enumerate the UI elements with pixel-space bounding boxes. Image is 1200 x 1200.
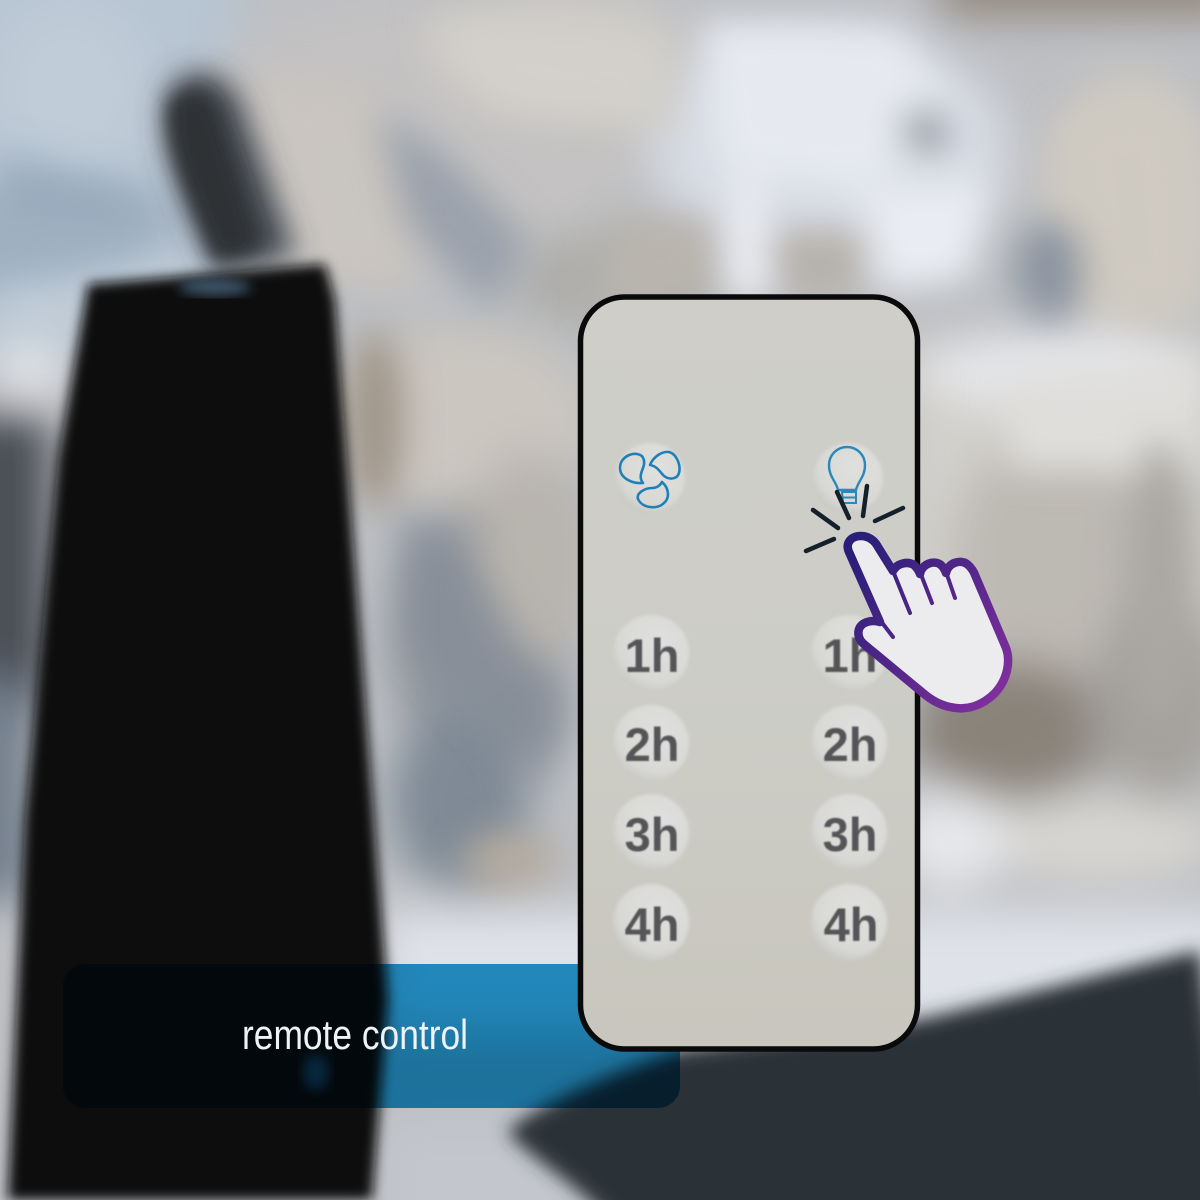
- timer buttons right: 1h: [823, 629, 877, 682]
- timer buttons left: [613, 615, 689, 960]
- icon: tap burst lines: [806, 486, 903, 551]
- remote control body: [580, 297, 918, 1049]
- icon: fan button: [615, 443, 685, 513]
- timer buttons right: 2h: [823, 718, 877, 771]
- label panel: [63, 964, 680, 1108]
- timer buttons left: 4h: [625, 898, 679, 951]
- timer buttons left: 3h: [625, 808, 679, 861]
- tower humidifier: [8, 72, 388, 1200]
- timer buttons right: 4h: [824, 898, 878, 951]
- label text: remote control: [242, 1011, 468, 1058]
- dark cushion: [508, 950, 1200, 1200]
- icon: pointing hand: [848, 536, 1008, 708]
- timer buttons left: 1h: [625, 629, 679, 682]
- icon: light bulb button: [813, 443, 883, 513]
- timer buttons left: 2h: [625, 718, 679, 771]
- timer buttons right: [811, 615, 887, 960]
- timer buttons right: 3h: [823, 808, 877, 861]
- blanket folds: [0, 20, 1200, 886]
